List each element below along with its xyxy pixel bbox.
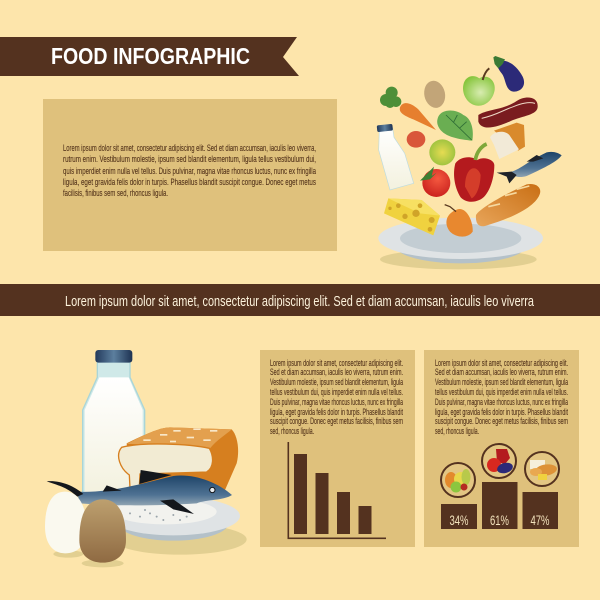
icon: bread loaf xyxy=(119,427,238,490)
panel: percentages xyxy=(424,350,579,547)
icon: tomato xyxy=(420,167,450,197)
panel: intro text xyxy=(43,99,337,251)
title: FOOD INFOGRAPHIC xyxy=(51,43,250,69)
icon: carrot xyxy=(380,87,436,130)
illustration: milk, bread, fish and eggs xyxy=(45,350,247,567)
illustration: food falling onto plate xyxy=(377,56,562,269)
icon: small apple xyxy=(407,131,425,148)
icon: white egg xyxy=(45,492,87,553)
band: subtitle xyxy=(0,284,600,316)
paragraph: Duis pulvinar, magna vitae rhoncus luctus, nunc ex fringilla xyxy=(270,397,403,407)
icon: bread slice xyxy=(490,123,525,159)
paragraph: Lorem ipsum dolor sit amet, consectetur adipiscing elit. xyxy=(270,358,403,368)
paragraph xyxy=(270,358,404,436)
icon: vegetable circle xyxy=(482,444,516,478)
plate xyxy=(107,497,240,541)
paragraph: tellus vestibulum dui, quis imperdiet enim nulla vel tellus. xyxy=(270,387,403,397)
stat: 61%: 61% xyxy=(490,513,509,528)
paragraph: suscipit congue. Donec eget metus facilisis, finibus sem xyxy=(270,416,403,426)
icon: milk bottle xyxy=(83,350,145,497)
plate shadow xyxy=(113,524,247,555)
stat: 61% xyxy=(482,482,518,529)
intro paragraph xyxy=(63,143,316,199)
paragraph xyxy=(435,358,569,436)
paragraph: Vestibulum molestie, ipsum sed blandit elementum, ligula xyxy=(270,377,404,387)
intro paragraph: Lorem ipsum dolor sit amet, consectetur adipiscing elit. Sed et diam accumsan, iaculis leo viverra, xyxy=(63,143,316,154)
title ribbon xyxy=(0,37,299,76)
intro paragraph: quis imperdiet enim nulla vel tellus. Duis pulvinar, magna vitae rhoncus luctus, nunc ex fringilla xyxy=(63,166,316,177)
icon: meat xyxy=(478,97,538,128)
icon: fruit circle xyxy=(441,463,475,497)
icon: brown egg xyxy=(79,499,126,563)
stat: 47% xyxy=(522,492,558,529)
icon: lime xyxy=(429,139,455,165)
icon: bread circle xyxy=(525,452,559,486)
icon: bell pepper xyxy=(454,144,494,202)
icon: fish xyxy=(497,152,562,183)
stat: 47%: 47% xyxy=(530,513,550,528)
icon: lettuce xyxy=(437,111,473,141)
paragraph: ligula, eget gravida felis dolor in turpis. Phasellus blandit xyxy=(270,407,403,417)
icon: peach xyxy=(445,205,473,237)
intro paragraph: rutrum enim. Vestibulum molestie, ipsum sed blandit elementum, ligula tellus vestibulum dui, xyxy=(63,154,316,165)
intro paragraph: facilisis, finibus sem sed, rhoncus ligula. xyxy=(63,188,168,199)
stat: 34%: 34% xyxy=(450,513,468,528)
paragraph: sed, rhoncus ligula. xyxy=(270,426,314,436)
stat: 34% xyxy=(441,504,477,529)
intro paragraph: ligula, eget gravida felis dolor in turpis. Phasellus blandit suscipit congue. Donec eget metus xyxy=(63,177,316,188)
paragraph: Sed et diam accumsan, iaculis leo viverra, rutrum enim. xyxy=(270,367,403,377)
icon: milk bottle xyxy=(377,124,414,190)
icon: baguette xyxy=(476,184,540,226)
icon: potato xyxy=(422,79,448,110)
egg shadow: brown xyxy=(82,559,124,567)
bar chart xyxy=(288,442,386,539)
icon: fish xyxy=(47,470,232,514)
egg shadow: white xyxy=(53,550,83,558)
panel: bar chart text xyxy=(260,350,415,547)
icon: eggplant xyxy=(493,56,524,92)
icon: cheese xyxy=(384,198,440,235)
paragraph: sed, rhoncus ligula. xyxy=(435,426,479,436)
plate xyxy=(378,218,543,269)
icon: green apple xyxy=(463,68,495,106)
